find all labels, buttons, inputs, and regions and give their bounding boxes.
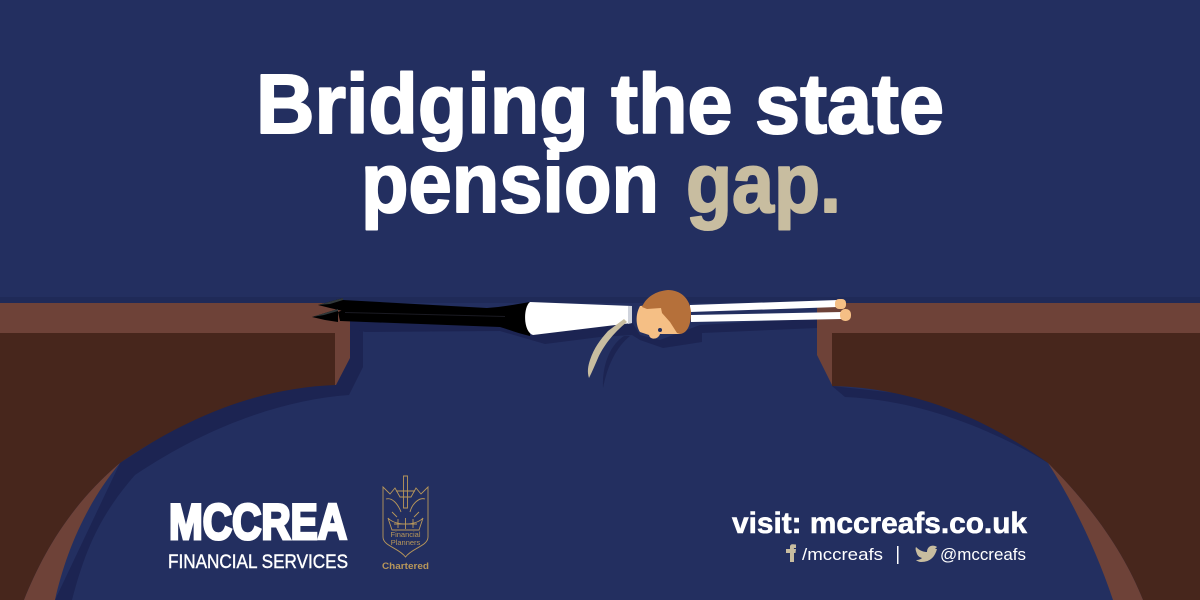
Chartered Financial Planners crest: Financial: [390, 530, 421, 539]
tie shadow: [603, 336, 630, 388]
title: Bridging the state: [256, 57, 944, 151]
social links: @mccreafs: [940, 546, 1026, 564]
Chartered Financial Planners crest: [382, 476, 429, 572]
right cliff light face: [817, 303, 1200, 385]
arms: [690, 300, 842, 322]
left cliff: [0, 303, 363, 600]
right cliff shadow: [832, 386, 1048, 463]
tie: [588, 319, 627, 378]
hands: [835, 299, 846, 309]
left cliff shadow: [55, 325, 363, 600]
icon: facebook: [786, 544, 796, 562]
collar: [628, 306, 632, 324]
icon: twitter: [916, 546, 937, 562]
title: pension: [361, 136, 659, 230]
man hanging across the gap: [312, 290, 851, 388]
left cliff dark face: [0, 333, 335, 600]
website address: visit: mccreafs.co.uk: [732, 507, 1027, 540]
man's shadow: [350, 318, 817, 348]
right cliff light sliver: [1048, 463, 1143, 600]
McCrea logo: MCCREA: [169, 494, 347, 550]
left cliff light face: [0, 303, 350, 385]
leg divider: [345, 312, 505, 317]
title: [256, 57, 944, 230]
McCrea logo: FINANCIAL SERVICES: [168, 551, 348, 573]
hair: [642, 290, 691, 334]
legs: [338, 300, 530, 336]
right cliff: [817, 303, 1200, 600]
title: gap.: [686, 136, 841, 230]
shoes: [312, 298, 343, 322]
social links: [786, 544, 1026, 564]
shirt: [525, 302, 632, 335]
right cliff dark face: [832, 333, 1200, 600]
face: [637, 304, 680, 339]
left cliff light sliver: [24, 463, 120, 600]
eye: [658, 328, 662, 332]
social links: /mccreafs: [802, 546, 883, 564]
Chartered Financial Planners crest: Chartered: [382, 561, 429, 572]
Chartered Financial Planners crest: Planners: [391, 538, 421, 547]
McCrea logo: [168, 494, 348, 573]
